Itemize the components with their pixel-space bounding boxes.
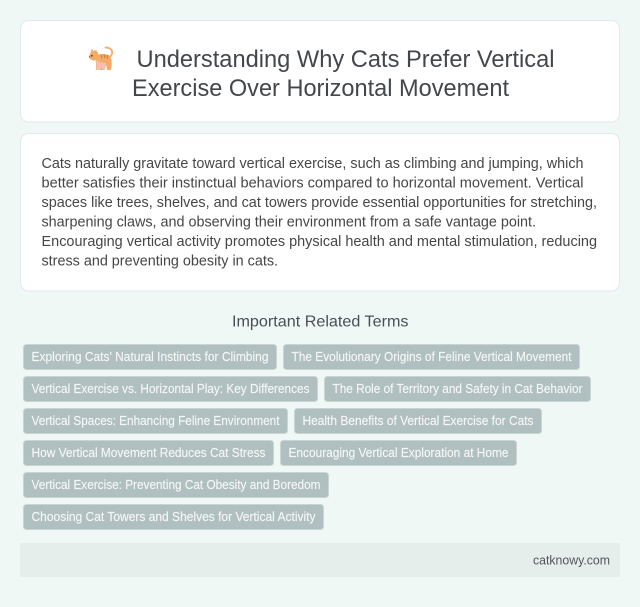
tag: Vertical Exercise vs. Horizontal Play: Key Differences xyxy=(32,381,310,396)
tag: Exploring Cats' Natural Instincts for Climbing xyxy=(32,349,268,364)
title text: Exercise Over Horizontal Movement xyxy=(132,75,509,102)
tag xyxy=(24,376,318,402)
description text: Encouraging vertical activity promotes physical health and mental stimulation, reducing xyxy=(42,234,597,250)
footer xyxy=(20,543,620,577)
tag: Health Benefits of Vertical Exercise for Cats xyxy=(302,413,534,428)
title text: Understanding Why Cats Prefer Vertical xyxy=(136,46,554,73)
tag: Vertical Exercise: Preventing Cat Obesity and Boredom xyxy=(32,477,320,492)
description text xyxy=(42,156,597,270)
tag xyxy=(24,472,328,498)
icon: orange cat xyxy=(89,48,112,70)
description text: stress and preventing obesity in cats. xyxy=(42,254,278,270)
tag xyxy=(324,376,590,402)
panel: title card xyxy=(20,20,620,122)
description text: Cats naturally gravitate toward vertical exercise, such as climbing and jumping, which xyxy=(42,156,584,172)
tag: How Vertical Movement Reduces Cat Stress xyxy=(32,445,266,460)
tag xyxy=(294,408,542,434)
tag xyxy=(24,344,276,370)
panel: description card xyxy=(20,134,620,291)
description text: better satisfies their instinctual behaviors compared to horizontal movement. Vertical xyxy=(42,176,584,192)
tag xyxy=(280,440,516,466)
description text: sharpening claws, and observing their environment from a safe vantage point. xyxy=(42,214,536,230)
tag: Choosing Cat Towers and Shelves for Vertical Activity xyxy=(32,509,316,524)
heading: important related terms: Important Related Terms xyxy=(232,314,409,330)
tag xyxy=(284,344,580,370)
title text xyxy=(132,46,554,102)
tag list xyxy=(24,344,590,530)
tag xyxy=(24,408,288,434)
tag xyxy=(24,440,274,466)
tag: The Evolutionary Origins of Feline Vertical Movement xyxy=(292,349,572,364)
tag: Encouraging Vertical Exploration at Home xyxy=(288,445,508,460)
footer: catknowy.com xyxy=(533,552,610,568)
tag: The Role of Territory and Safety in Cat Behavior xyxy=(332,381,583,396)
tag xyxy=(24,504,324,530)
tag: Vertical Spaces: Enhancing Feline Environment xyxy=(32,413,280,428)
description text: spaces like trees, shelves, and cat towers provide essential opportunities for stretching, xyxy=(42,195,597,211)
